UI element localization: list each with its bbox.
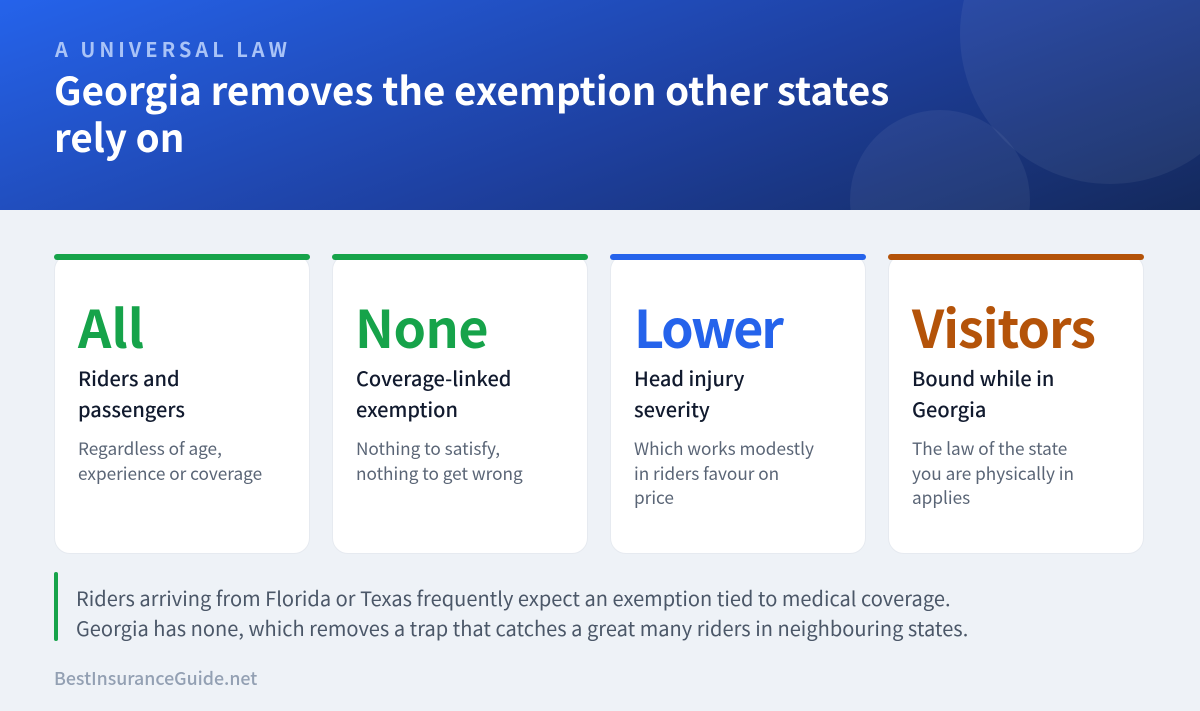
subheading	[356, 363, 511, 422]
description: Nothing to satisfy,	[356, 435, 500, 460]
callout text: Riders arriving from Florida or Texas frequently expect an exemption tied to medical coverage.	[76, 583, 951, 612]
accent bar	[54, 254, 310, 260]
callout text: Georgia has none, which removes a trap that catches a great many riders in neighbouring states.	[76, 613, 968, 642]
big word: None	[355, 288, 488, 363]
subheading: Georgia	[912, 394, 986, 422]
subheading: Bound while in	[912, 363, 1054, 392]
description	[912, 435, 1074, 509]
footer brand: BestInsuranceGuide.net	[54, 665, 257, 691]
accent bar	[332, 254, 588, 260]
big word: Visitors	[912, 288, 1095, 363]
description: price	[634, 484, 674, 509]
subheading	[912, 363, 1054, 422]
description: The law of the state	[912, 435, 1067, 460]
callout text	[76, 583, 968, 642]
subheading: Coverage-linked	[356, 363, 511, 392]
description	[356, 435, 523, 484]
big word: All	[78, 288, 144, 363]
description: Regardless of age,	[78, 435, 222, 460]
subheading: passengers	[78, 394, 185, 422]
description: Which works modestly	[634, 435, 814, 460]
title	[54, 61, 889, 164]
big word: Lower	[634, 288, 782, 363]
decorative circle large	[960, 0, 1200, 184]
subheading: Riders and	[78, 363, 180, 392]
subheading: Head injury	[634, 363, 744, 392]
description: applies	[912, 484, 970, 509]
card: All	[54, 254, 310, 554]
subheading	[634, 363, 744, 422]
card: None	[332, 254, 588, 554]
subheading: severity	[634, 394, 710, 422]
header banner	[0, 0, 1200, 210]
description: you are physically in	[912, 460, 1074, 484]
title: rely on	[54, 108, 184, 164]
accent bar	[888, 254, 1144, 260]
description: experience or coverage	[78, 460, 262, 484]
accent bar	[610, 254, 866, 260]
card: Visitors	[888, 254, 1144, 554]
description	[78, 435, 262, 484]
subheading: exemption	[356, 394, 458, 422]
card: Lower	[610, 254, 866, 554]
subheading	[78, 363, 185, 422]
eyebrow label: A UNIVERSAL LAW	[55, 34, 291, 63]
description: in riders favour on	[634, 460, 779, 484]
description	[634, 435, 814, 509]
callout accent bar	[54, 572, 58, 641]
description: nothing to get wrong	[356, 460, 523, 484]
decorative circle small	[850, 110, 1030, 290]
title: Georgia removes the exemption other states	[54, 61, 889, 117]
